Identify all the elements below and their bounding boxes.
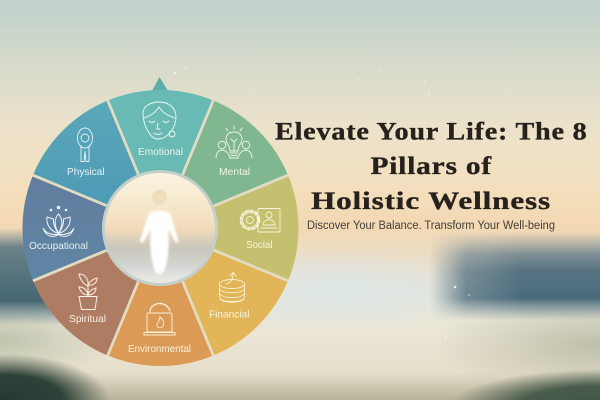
segment: Physical <box>33 100 160 228</box>
icon: lightbulb with people <box>216 126 252 158</box>
segment: Emotional <box>108 90 213 228</box>
subtitle: Discover Your Balance. Transform Your Well-being <box>307 220 555 232</box>
label: Mental: Mental <box>219 166 250 178</box>
label: Physical: Physical <box>67 166 104 178</box>
icon: face <box>143 102 176 139</box>
title: Pillars of <box>370 151 492 180</box>
segment: Environmental <box>108 228 213 366</box>
icon: potted plant <box>79 274 97 310</box>
label: Financial: Financial <box>209 308 250 320</box>
label: Social: Social <box>246 239 272 251</box>
icon: gear and person card <box>241 208 280 232</box>
icon: coin stack with arrow <box>220 272 244 302</box>
pointer triangle <box>152 77 168 91</box>
wheel of eight pillars <box>22 77 299 366</box>
icon: lotus with stars <box>43 214 74 236</box>
segment: Occupational <box>22 175 160 281</box>
label: Occupational: Occupational <box>29 240 88 252</box>
segment: Spiritual <box>33 228 160 356</box>
segment: Financial <box>160 228 288 356</box>
title: Elevate Your Life: The 8 <box>275 116 588 146</box>
icon: three stars <box>50 206 67 211</box>
central disc <box>102 170 218 286</box>
segment: Mental <box>160 100 288 228</box>
icon: laptop with flame and sun <box>144 304 175 335</box>
label: Emotional: Emotional <box>138 146 183 158</box>
label: Environmental: Environmental <box>128 343 191 355</box>
segment: Social <box>160 175 299 281</box>
title <box>275 116 588 215</box>
sparkles <box>174 67 470 339</box>
label: Spiritual: Spiritual <box>69 313 106 325</box>
title: Holistic Wellness <box>311 186 551 215</box>
figure head <box>152 190 167 204</box>
glowing figure <box>140 211 178 274</box>
icon: figure in circle <box>78 128 92 162</box>
